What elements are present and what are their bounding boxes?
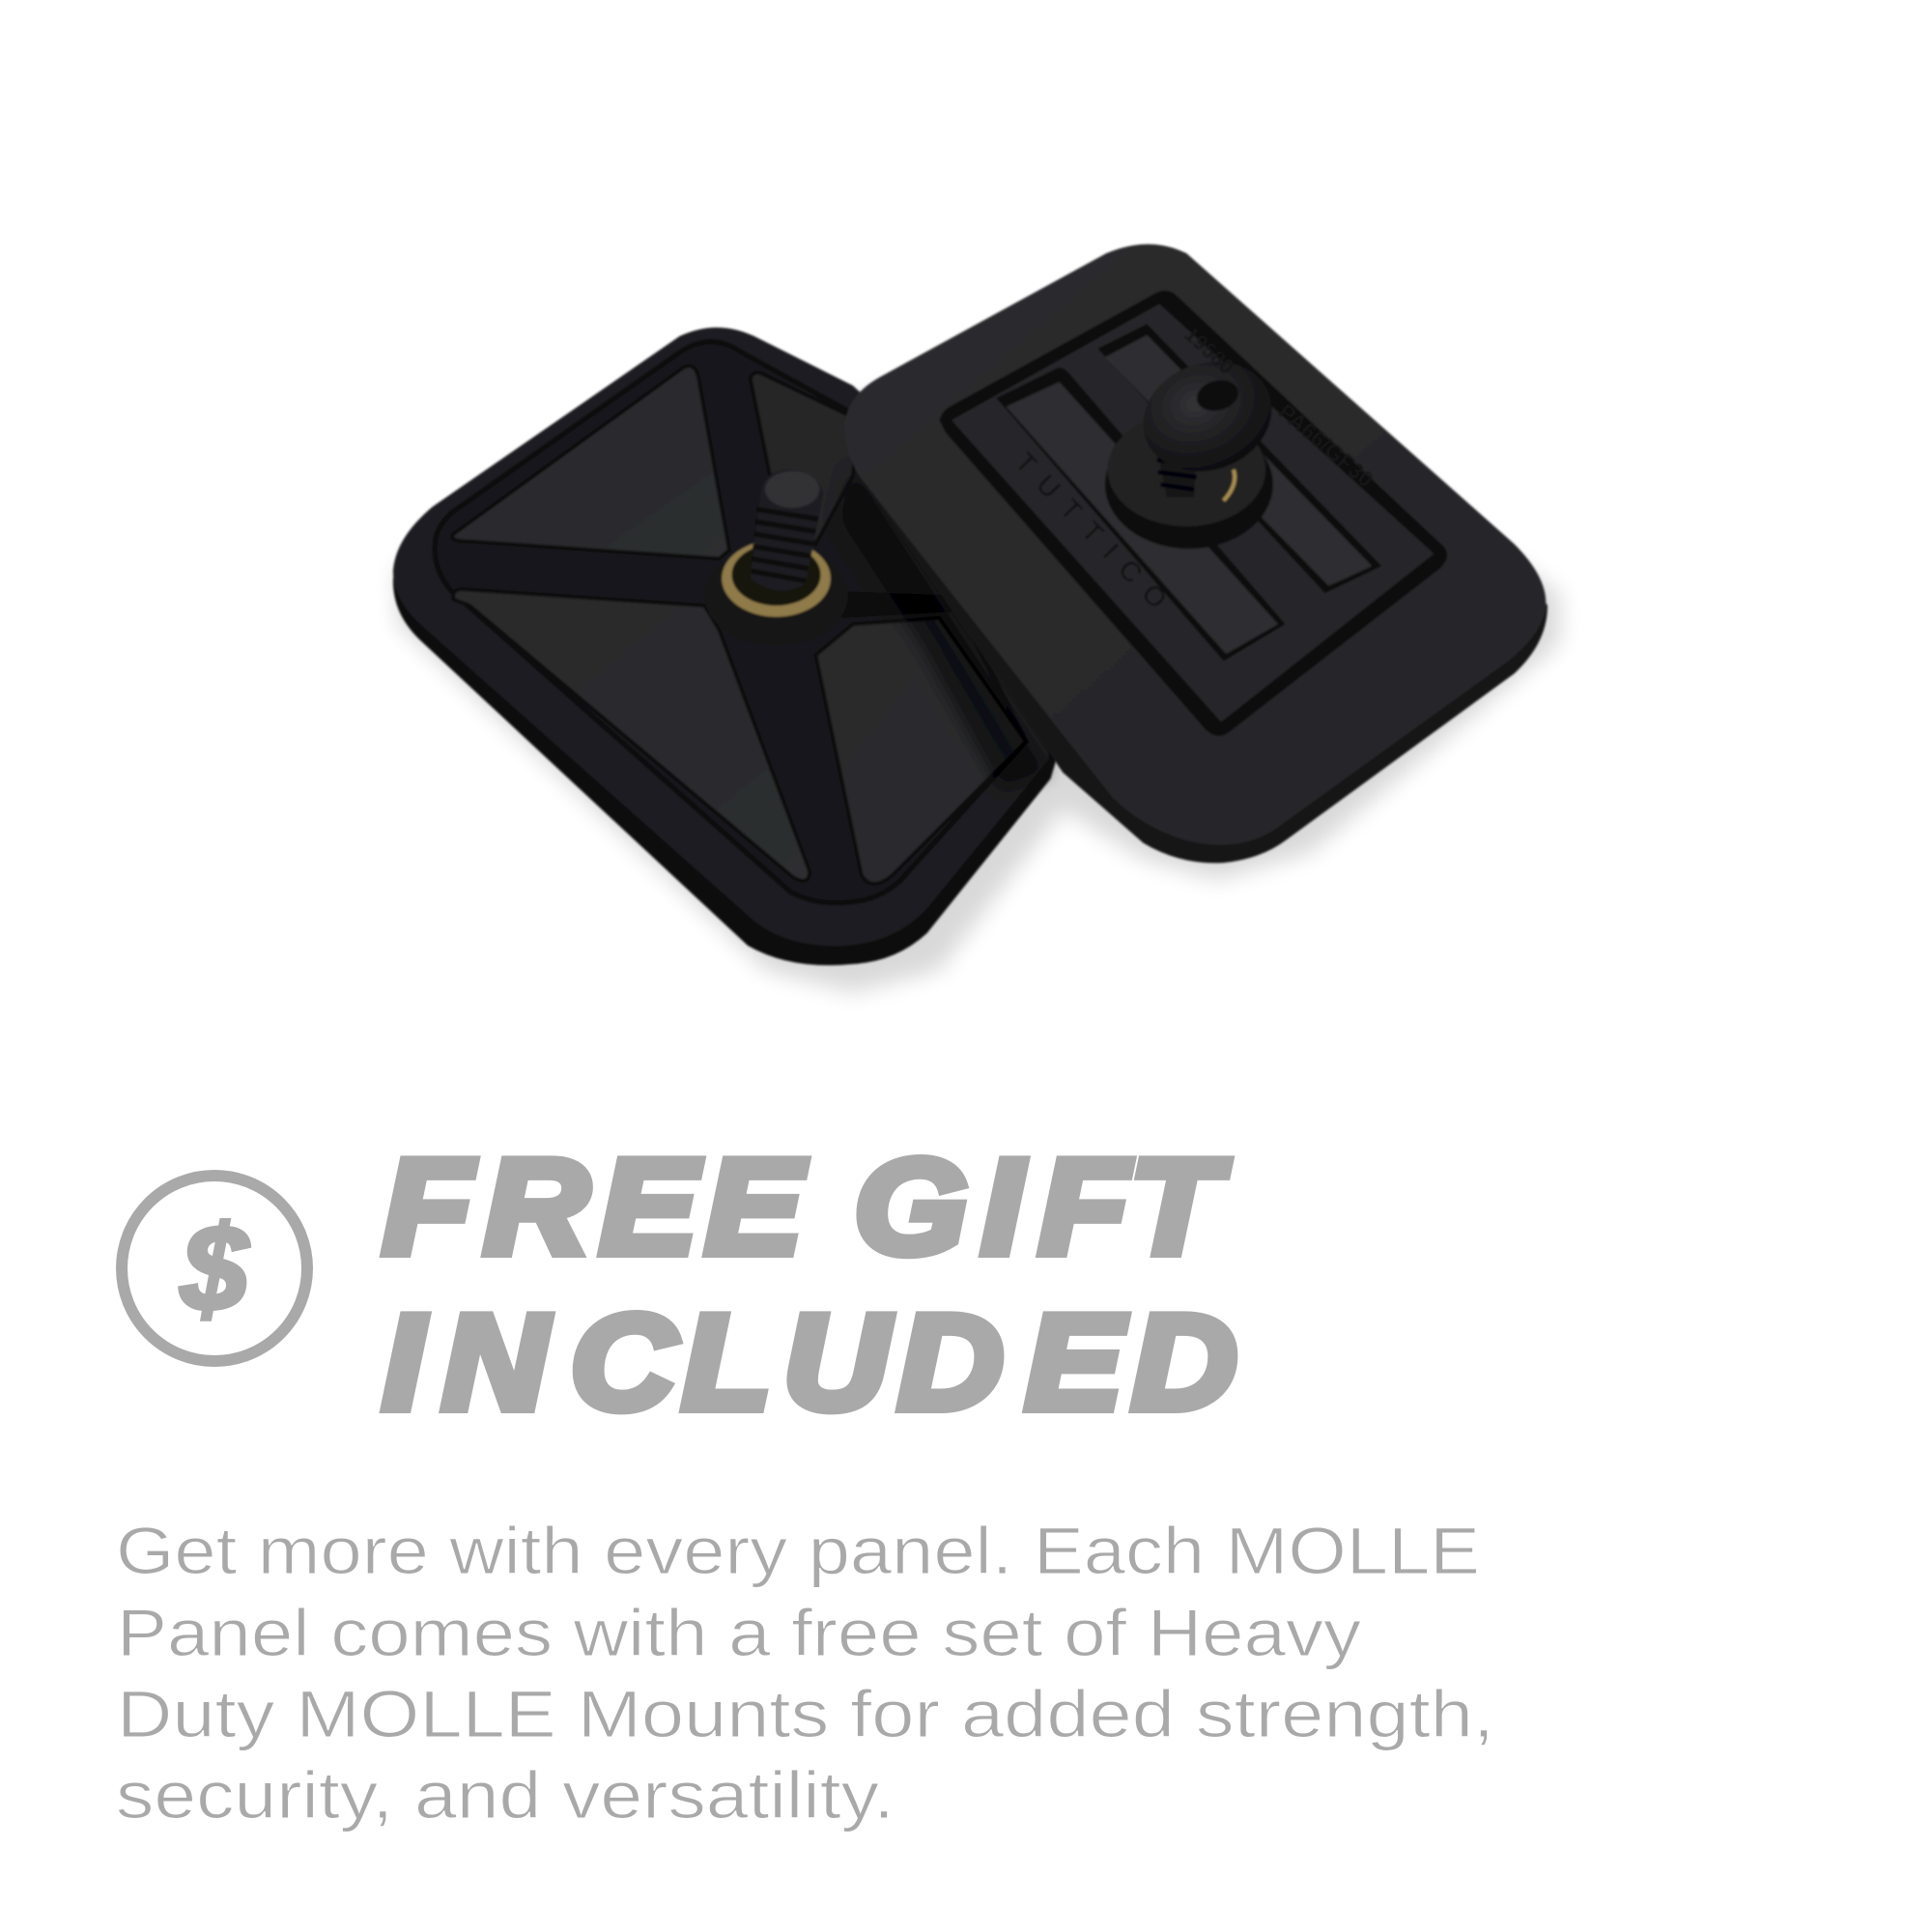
brass ring: [722, 540, 831, 616]
hub around the screw: [704, 547, 848, 645]
icon: dollar coin: $: [181, 1203, 250, 1336]
raised rectangular frame: [939, 291, 1447, 736]
icon: dollar coin: [122, 1176, 307, 1361]
left plate recess outline: [435, 342, 1026, 903]
left plate side edge: [393, 327, 1058, 965]
product photo: MOLLE mounts: [393, 244, 1560, 992]
heading: free gift included: [383, 1131, 1236, 1437]
threaded screw: [751, 469, 823, 591]
slot 2: [1097, 324, 1381, 593]
body text: Panel comes with a free set of Heavy: [117, 1596, 1362, 1670]
right mount plate: [844, 244, 1548, 863]
washer and bolt: [1105, 344, 1288, 549]
left mount plate: [393, 327, 1058, 965]
heading: free gift included: FREE GIFT: [383, 1131, 1229, 1282]
panel: top-right triangle: [751, 373, 859, 544]
drop shadow under mounts: [395, 371, 1560, 992]
heading: free gift included: INCLUDED: [383, 1287, 1236, 1437]
panel: top-left triangle: [452, 366, 729, 558]
body text: [116, 1514, 1494, 1833]
molded part number: 19580: [1179, 322, 1239, 379]
molded brand name: TUTTICO: [1009, 446, 1173, 614]
right plate side edge: [844, 371, 1548, 863]
cast shadow from right plate: [840, 469, 1051, 791]
right mount plate: PA66/GF30: [1274, 399, 1378, 492]
panel: lower-right triangle: [815, 618, 1026, 884]
panel: lower-left triangle: [453, 589, 810, 881]
right plate face: [844, 244, 1546, 845]
right rib: [828, 591, 964, 618]
body text: Duty MOLLE Mounts for added strength,: [117, 1677, 1494, 1751]
body text: Get more with every panel. Each MOLLE: [116, 1514, 1480, 1588]
left plate rim: [393, 327, 1051, 946]
body text: security, and versatility.: [116, 1758, 895, 1833]
slot 1: [996, 368, 1286, 662]
